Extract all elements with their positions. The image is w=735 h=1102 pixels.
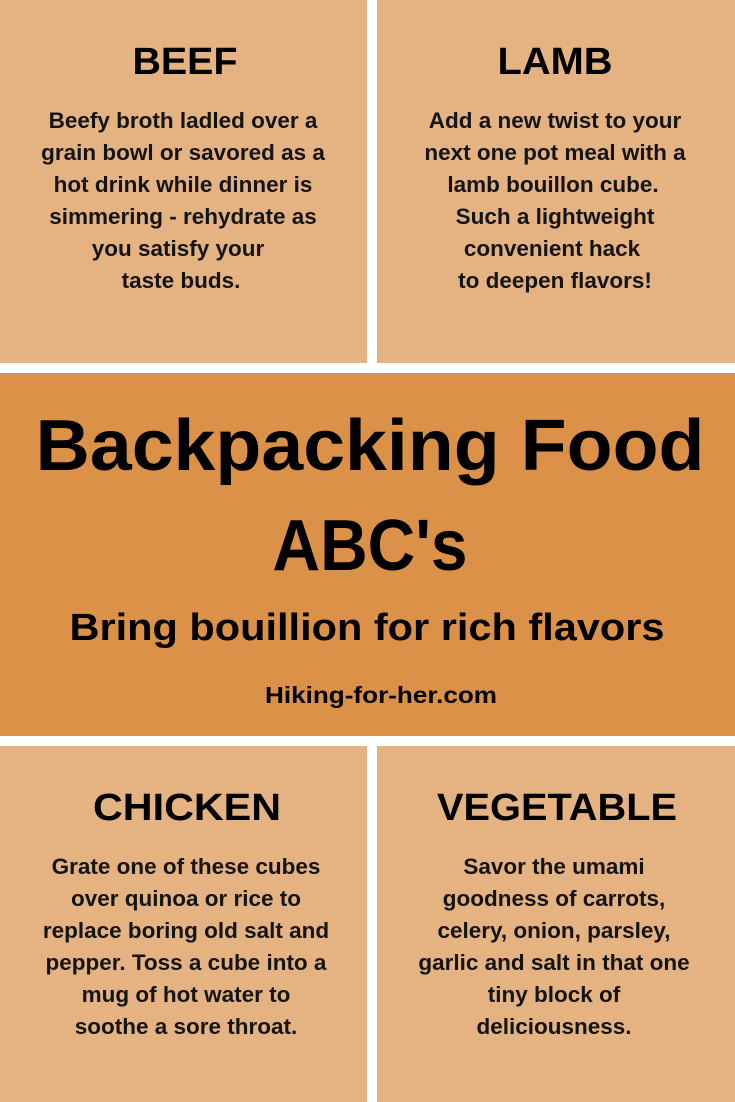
text: vegetable xyxy=(418,854,690,1039)
text: lamb: convenient hack xyxy=(464,236,641,261)
text: beef: Beefy broth ladled over a xyxy=(49,108,318,133)
text: lamb xyxy=(424,108,686,293)
text: chicken: pepper. Toss a cube into a xyxy=(46,950,327,975)
title: Backpacking Food xyxy=(36,406,704,486)
text: vegetable: deliciousness. xyxy=(476,1014,632,1039)
text: lamb: lamb bouillon cube. xyxy=(447,172,659,197)
text: chicken xyxy=(43,854,329,1039)
text: vegetable: Savor the umami xyxy=(463,854,645,879)
panel: lamb xyxy=(377,0,735,363)
text: lamb: Such a lightweight xyxy=(456,204,655,229)
text: vegetable: tiny block of xyxy=(488,982,621,1007)
heading: chicken: CHICKEN xyxy=(93,787,281,829)
text: beef: you satisfy your xyxy=(92,236,265,261)
text: vegetable: celery, onion, parsley, xyxy=(437,918,671,943)
text: beef xyxy=(41,108,325,293)
text: beef: simmering - rehydrate as xyxy=(49,204,317,229)
website: Hiking-for-her.com xyxy=(265,682,497,708)
panel: beef xyxy=(0,0,367,363)
panel: title band: ABC's xyxy=(272,506,468,586)
heading: beef: BEEF xyxy=(132,41,238,83)
panel: title band xyxy=(0,373,735,736)
heading: vegetable: VEGETABLE xyxy=(437,787,677,829)
text: beef: taste buds. xyxy=(122,268,240,293)
text: lamb: to deepen flavors! xyxy=(458,268,652,293)
text: lamb: next one pot meal with a xyxy=(424,140,686,165)
text: vegetable: goodness of carrots, xyxy=(443,886,665,911)
panel: vegetable xyxy=(377,746,735,1102)
text: chicken: Grate one of these cubes xyxy=(52,854,320,879)
text: chicken: mug of hot water to xyxy=(82,982,290,1007)
text: chicken: soothe a sore throat. xyxy=(75,1014,297,1039)
panel: chicken xyxy=(0,746,367,1102)
heading: lamb: LAMB xyxy=(498,41,612,83)
text: lamb: Add a new twist to your xyxy=(429,108,681,133)
text: chicken: over quinoa or rice to xyxy=(71,886,301,911)
text: beef: hot drink while dinner is xyxy=(54,172,312,197)
text: beef: grain bowl or savored as a xyxy=(41,140,325,165)
text: chicken: replace boring old salt and xyxy=(43,918,329,943)
text: vegetable: garlic and salt in that one xyxy=(418,950,690,975)
subtitle: Bring bouillion for rich flavors xyxy=(70,607,664,649)
